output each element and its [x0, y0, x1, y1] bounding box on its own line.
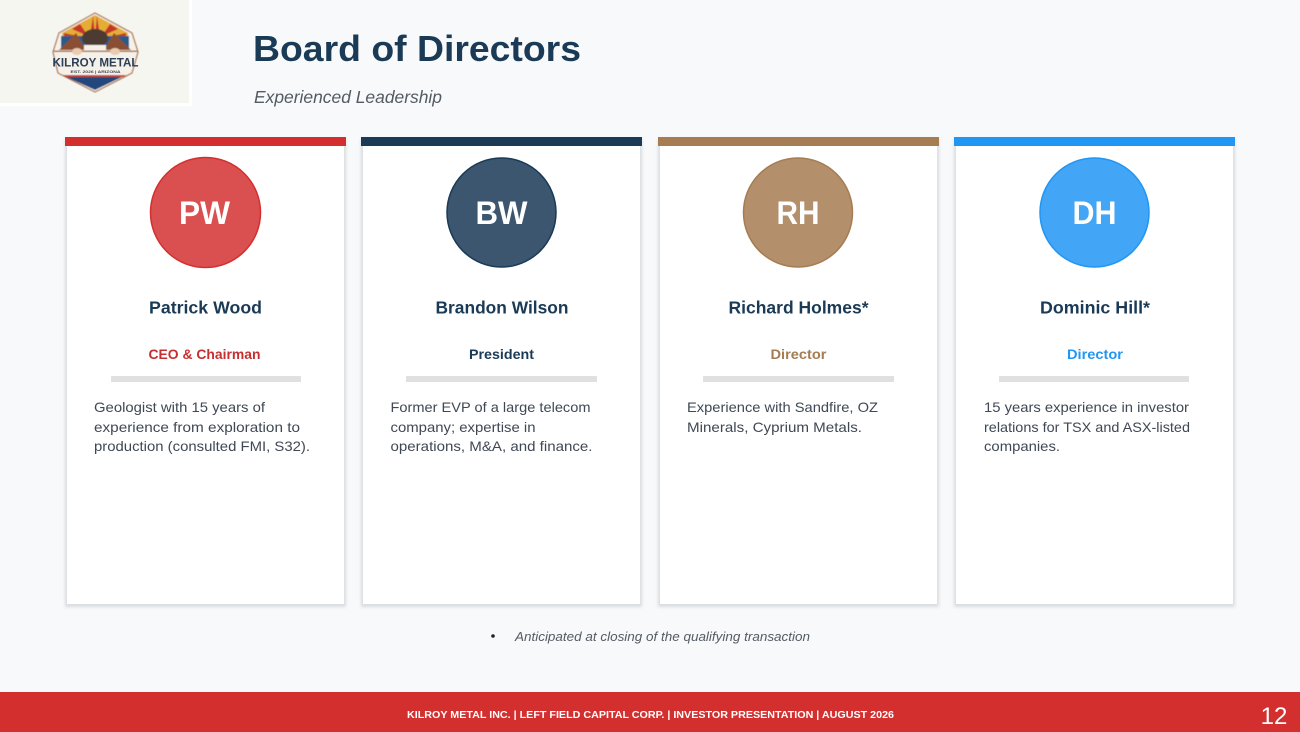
name: Brandon Wilson	[436, 298, 568, 318]
bio: Geologist with 15 years of	[94, 399, 265, 415]
role: President	[469, 346, 534, 362]
name: Richard Holmes*	[728, 298, 869, 318]
name: Dominic Hill*	[1040, 298, 1150, 318]
bio	[94, 399, 310, 454]
divider bar	[703, 376, 894, 382]
avatar: RH	[744, 158, 852, 267]
bio: production (consulted FMI, S32).	[94, 438, 310, 454]
avatar: DH: DH	[1072, 195, 1116, 231]
panel: Dominic Hill	[954, 137, 1235, 607]
role: Director	[1067, 346, 1124, 362]
divider bar	[406, 376, 597, 382]
bio: experience from exploration to	[94, 419, 300, 435]
panel: Brandon Wilson	[361, 137, 642, 607]
role: Director	[770, 346, 827, 362]
accent bar: red	[65, 137, 346, 146]
accent bar: navy	[361, 137, 642, 146]
footer bar	[0, 692, 1300, 732]
avatar: PW	[150, 158, 260, 268]
panel: Richard Holmes	[658, 137, 939, 607]
divider bar	[999, 376, 1189, 382]
bio: Experience with Sandfire, OZ	[687, 399, 878, 415]
panel: Patrick Wood	[65, 137, 346, 607]
bio	[390, 399, 592, 454]
bio	[984, 399, 1190, 454]
avatar: BW: BW	[476, 195, 528, 231]
title: Board of Directors	[253, 28, 581, 69]
footer text: KILROY METAL INC. | LEFT FIELD CAPITAL CORP. | INVESTOR PRESENTATION | AUGUST 2026	[407, 710, 894, 721]
bio: Minerals, Cyprium Metals.	[687, 419, 862, 435]
bio	[687, 399, 878, 435]
name: Patrick Wood	[149, 298, 262, 318]
bio: company; expertise in	[390, 419, 536, 435]
logo: Kilroy Metal: KILROY METAL	[52, 58, 138, 70]
page number: 12	[1261, 703, 1287, 730]
accent bar: tan	[658, 137, 939, 146]
footnote: Anticipated at closing of the qualifying transaction	[514, 629, 810, 644]
avatar: DH	[1040, 158, 1149, 267]
accent bar: blue	[954, 137, 1235, 146]
bio: relations for TSX and ASX-listed	[984, 419, 1190, 435]
divider bar	[111, 376, 301, 382]
role: CEO & Chairman	[148, 346, 260, 362]
avatar: PW: PW	[179, 195, 231, 231]
bio: Former EVP of a large telecom	[390, 399, 590, 415]
avatar: BW	[447, 158, 556, 267]
logo: Kilroy Metal	[0, 0, 192, 106]
logo: Kilroy Metal: EST. 2026 | ARIZONA	[70, 69, 121, 74]
bio: 15 years experience in investor	[984, 399, 1189, 415]
subtitle: Experienced Leadership	[254, 87, 442, 107]
bio: operations, M&A, and finance.	[390, 438, 592, 454]
avatar: RH: RH	[776, 195, 820, 231]
bio: companies.	[984, 438, 1060, 454]
